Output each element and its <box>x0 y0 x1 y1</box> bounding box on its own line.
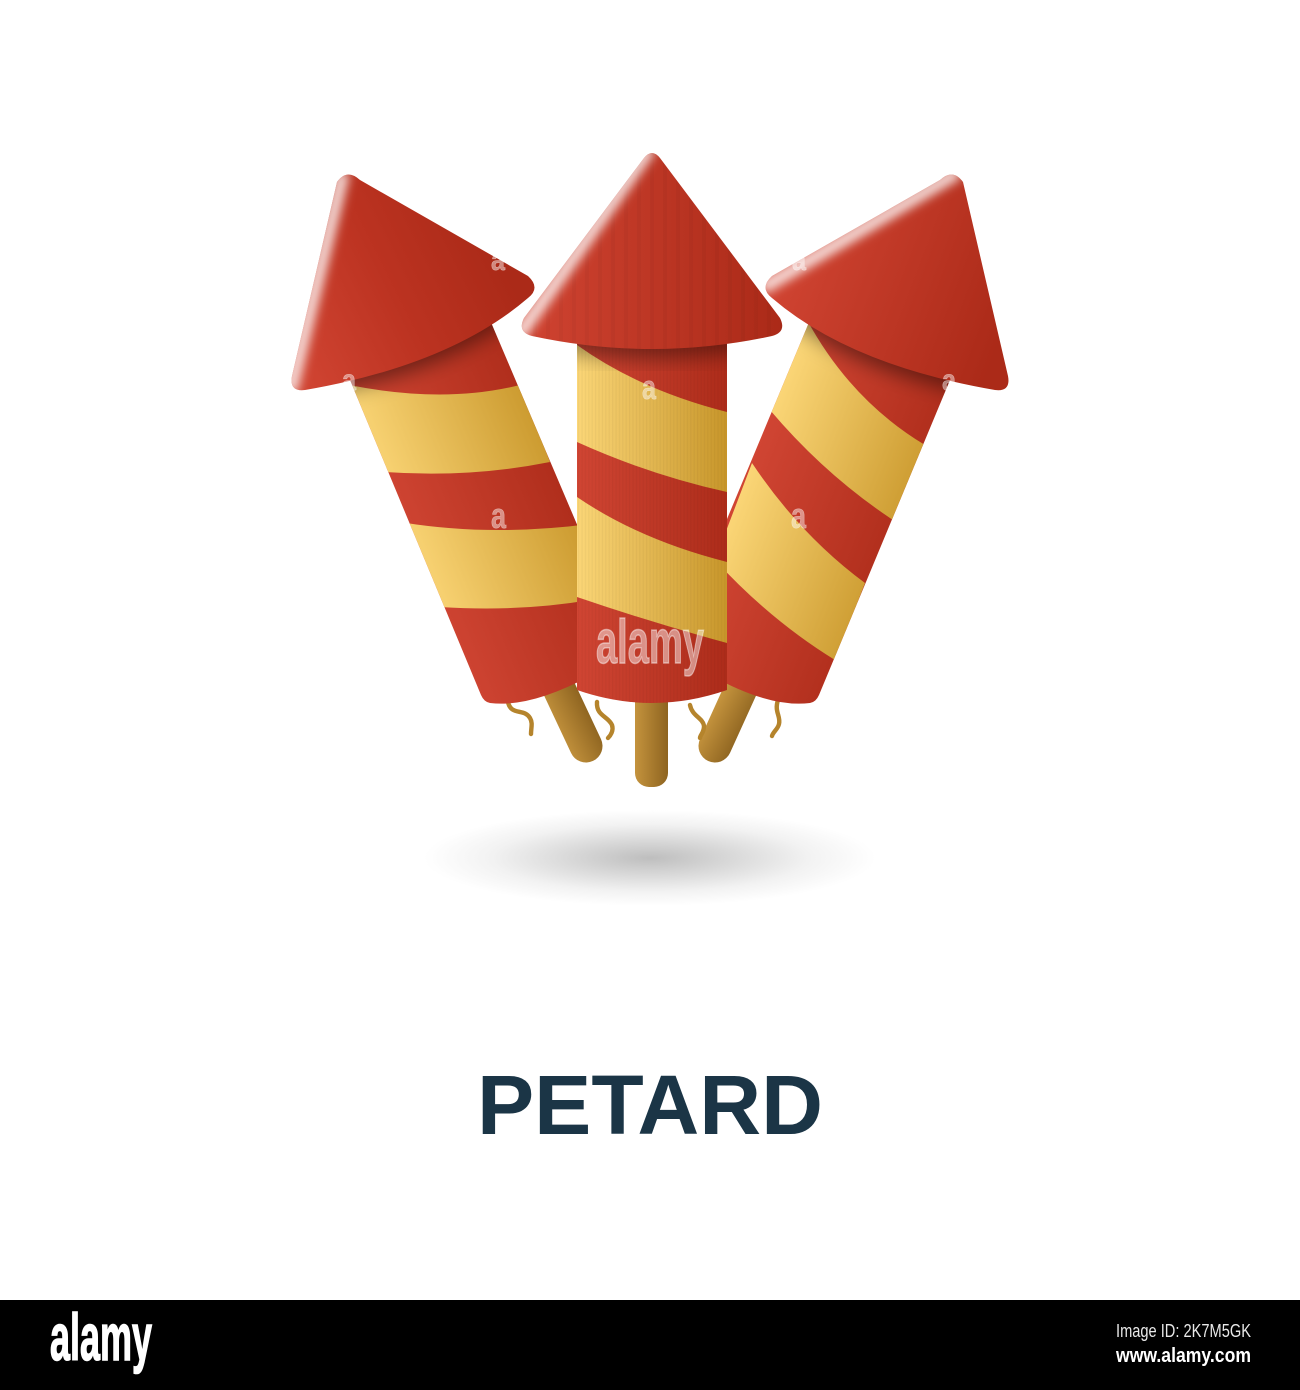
sticks <box>555 680 745 787</box>
watermark: alamy: a <box>491 495 507 536</box>
left rocket body <box>350 324 577 704</box>
right rocket body <box>727 324 950 704</box>
right rocket <box>727 174 1008 704</box>
left rocket <box>292 174 577 704</box>
right rocket cone <box>766 174 1008 390</box>
icon: three petard rockets <box>285 148 1015 787</box>
centre rocket body <box>577 344 727 703</box>
footer bar <box>0 1300 1300 1390</box>
watermark: alamy: a <box>792 244 806 277</box>
footer logo: alamy <box>50 1300 152 1374</box>
website: www.alamy.com <box>1115 1345 1251 1367</box>
centre rocket cone <box>522 153 782 349</box>
watermark: alamy <box>342 244 956 677</box>
title: PETARD <box>477 1058 823 1152</box>
watermark: alamy: a <box>642 369 657 407</box>
centre rocket <box>515 148 790 720</box>
watermark: alamy: a <box>791 495 807 536</box>
left rocket cone <box>292 174 534 390</box>
watermark: alamy: a <box>942 364 956 397</box>
watermark: alamy: a <box>491 244 505 277</box>
watermark: alamy: a <box>342 364 356 397</box>
image id: Image ID: 2K7M5GK <box>1116 1321 1251 1341</box>
watermark: alamy: alamy <box>596 608 704 677</box>
fuses <box>508 700 779 738</box>
ground shadow <box>424 810 876 906</box>
